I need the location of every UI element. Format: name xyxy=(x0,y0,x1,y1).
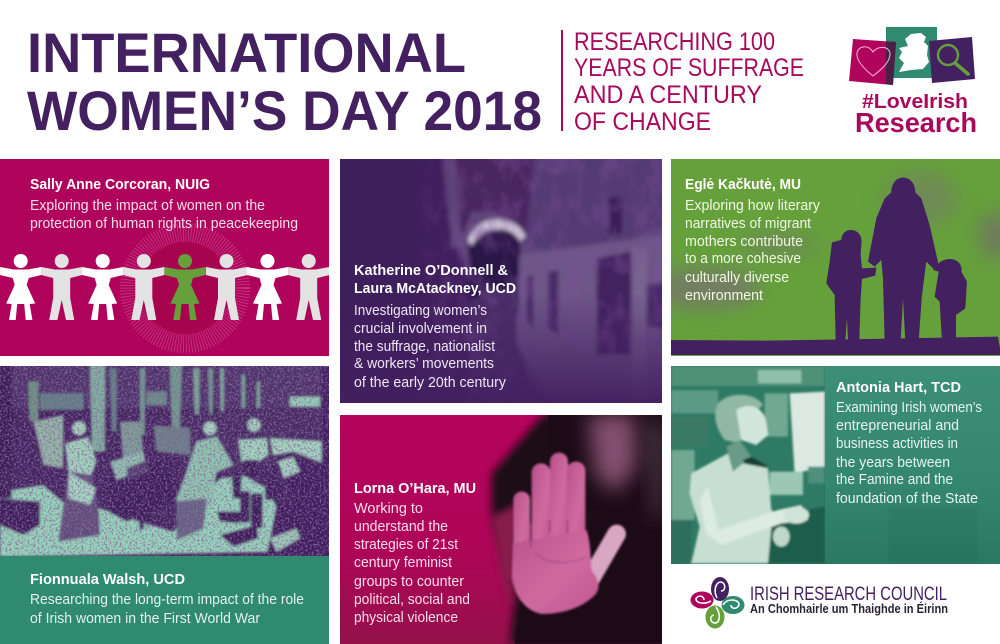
text: Antonia Hart: foundation of the State xyxy=(836,491,978,507)
council name: IRISH RESEARCH COUNCIL xyxy=(750,584,947,605)
floor xyxy=(0,475,283,557)
paper chain of people xyxy=(0,254,329,320)
ground xyxy=(668,337,1000,355)
text: O'Donnell and McAtackney: & workers’ movements xyxy=(354,356,494,372)
text: Fionnuala Walsh: Fionnuala Walsh, UCD xyxy=(30,572,185,588)
logo: Irish Research Council xyxy=(690,577,948,628)
title: WOMEN’S DAY 2018 xyxy=(27,79,542,142)
woman left xyxy=(72,421,86,436)
mother xyxy=(868,178,939,342)
hair xyxy=(715,395,763,443)
sunburst xyxy=(131,234,239,342)
text: Antonia Hart: entrepreneurial and xyxy=(836,418,959,434)
text: Lorna O'Hara: understand the xyxy=(354,519,448,535)
background behind overlay xyxy=(824,390,825,467)
text: Eglė Kačkutė: mothers contribute xyxy=(685,234,803,250)
raised hand photo xyxy=(340,415,662,644)
text: Fionnuala Walsh: Researching the long-term impact of the role xyxy=(30,592,304,608)
logo wordmark: #LoveIrish xyxy=(862,90,968,113)
council name in Irish: An Chomhairle um Thaighde in Éirinn xyxy=(750,601,948,616)
icon: magnifying glass xyxy=(938,45,968,74)
text: Eglė Kačkutė: environment xyxy=(685,288,763,304)
woman right xyxy=(247,418,261,432)
text: Eglė Kačkutė: narratives of migrant xyxy=(685,216,811,232)
panel: Lorna O'Hara xyxy=(340,415,662,644)
panel: Fionnuala Walsh xyxy=(0,362,332,644)
machine xyxy=(108,460,178,522)
subtitle: RESEARCHING 100 xyxy=(574,28,775,56)
text: Lorna O'Hara: political, social and xyxy=(354,592,470,608)
arm and hands xyxy=(700,487,808,545)
face xyxy=(736,406,768,445)
text: Antonia Hart: the years between xyxy=(836,455,950,471)
text: Eglė Kačkutė: culturally diverse xyxy=(685,270,789,286)
text: Antonia Hart xyxy=(836,380,982,507)
text: O'Donnell and McAtackney: of the early 20th century xyxy=(354,375,507,391)
text: O'Donnell and McAtackney: the suffrage, nationalist xyxy=(354,339,495,355)
woman centre xyxy=(203,422,217,435)
text: Fionnuala Walsh: of Irish women in the First World War xyxy=(30,611,260,627)
text: Lorna O'Hara: groups to counter xyxy=(354,574,464,590)
text: Antonia Hart: the Famine and the xyxy=(836,472,953,488)
child left xyxy=(826,230,876,340)
text: Lorna O'Hara xyxy=(354,481,476,626)
text: Antonia Hart: Antonia Hart, TCD xyxy=(836,380,961,396)
prison corridor photo xyxy=(340,155,665,403)
coat xyxy=(690,453,781,563)
shells xyxy=(0,475,281,547)
text: Sally Anne Corcoran: protection of human rights in peacekeeping xyxy=(30,216,298,232)
pharmacy photo xyxy=(671,366,1000,564)
child right xyxy=(933,259,967,342)
text: Fionnuala Walsh xyxy=(30,572,304,627)
panel: Eglė Kačkutė xyxy=(648,159,1000,356)
crowd middle xyxy=(180,408,330,475)
family silhouette scene xyxy=(648,159,1000,356)
hand xyxy=(512,453,617,614)
text: Lorna O'Hara: Working to xyxy=(354,501,423,517)
text: Antonia Hart: business activities in xyxy=(836,436,958,452)
title xyxy=(27,21,542,142)
subtitle xyxy=(561,28,804,136)
text: Lorna O'Hara: strategies of 21st xyxy=(354,537,458,553)
subtitle: AND A CENTURY xyxy=(574,81,762,109)
panel: Antonia Hart xyxy=(671,366,1000,564)
icon: map of Ireland xyxy=(899,33,929,72)
panel: Katherine O'Donnell and Laura McAtackney xyxy=(340,155,665,403)
text: Lorna O'Hara: Lorna O’Hara, MU xyxy=(354,481,476,497)
text: O'Donnell and McAtackney xyxy=(354,263,516,391)
text: Sally Anne Corcoran: Exploring the impact of women on the xyxy=(30,198,265,214)
text: O'Donnell and McAtackney: Katherine O’Donnell & xyxy=(354,263,509,279)
text: Sally Anne Corcoran: Sally Anne Corcoran, NUIG xyxy=(30,177,210,193)
logo: LoveIrish Research xyxy=(849,27,977,138)
title: INTERNATIONAL xyxy=(27,21,466,84)
icon: four-part swirl xyxy=(690,577,744,628)
text: Lorna O'Hara: physical violence xyxy=(354,610,458,626)
text: Eglė Kačkutė xyxy=(685,177,821,304)
text: Eglė Kačkutė: to a more cohesive xyxy=(685,251,801,267)
collar xyxy=(726,440,751,472)
text: Sally Anne Corcoran xyxy=(30,177,298,232)
text: Lorna O'Hara: century feminist xyxy=(354,555,452,571)
green caption bar xyxy=(0,556,329,644)
text: Antonia Hart: Examining Irish women’s xyxy=(836,400,982,416)
foreground worker xyxy=(266,454,316,554)
text: O'Donnell and McAtackney: Investigating women’s xyxy=(354,303,487,319)
icon: heart xyxy=(857,47,890,76)
factory engraving xyxy=(0,362,332,562)
text: O'Donnell and McAtackney: Laura McAtackney, UCD xyxy=(354,281,516,297)
subtitle: OF CHANGE xyxy=(574,108,711,136)
text: O'Donnell and McAtackney: crucial involvement in xyxy=(354,321,487,337)
subtitle: YEARS OF SUFFRAGE xyxy=(574,54,804,82)
logo wordmark xyxy=(855,90,977,138)
logo wordmark: Research xyxy=(855,107,977,138)
panel: Sally Anne Corcoran xyxy=(0,159,329,356)
text: Eglė Kačkutė: Eglė Kačkutė, MU xyxy=(685,177,801,193)
text: Eglė Kačkutė: Exploring how literary xyxy=(685,198,821,214)
teal overlay xyxy=(825,366,1000,564)
